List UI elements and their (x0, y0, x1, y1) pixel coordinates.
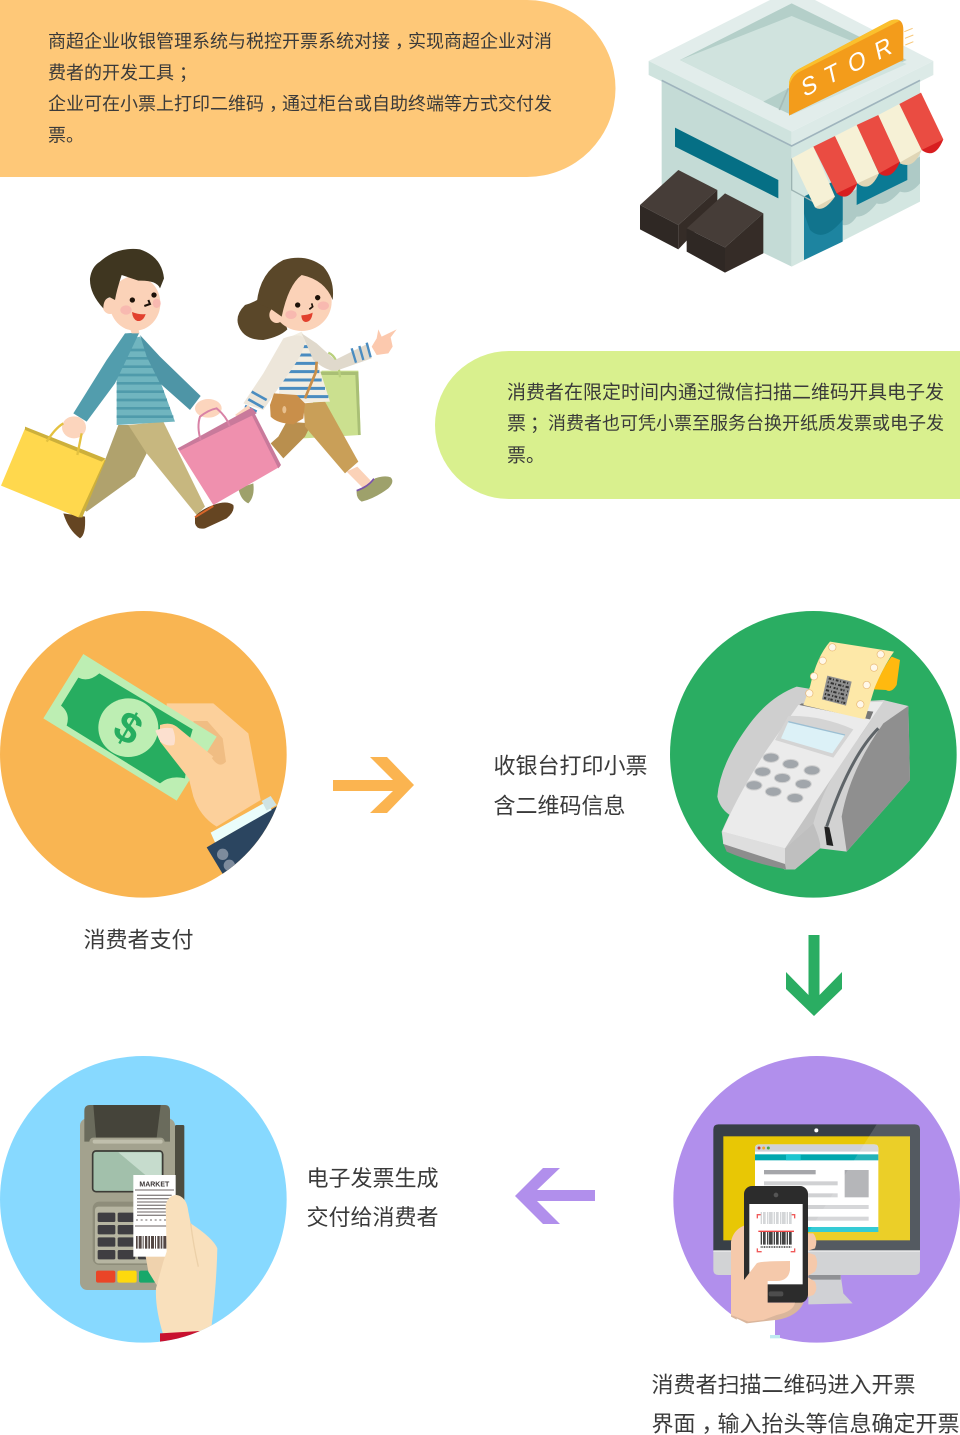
step 1 icon: consumer pays with cash: $ (105, 702, 150, 755)
panel: green consumer bubble: 票。 (507, 446, 545, 466)
illustration: store: R (873, 32, 894, 67)
step 1 icon: consumer pays with cash (0, 611, 293, 898)
arrow: green down (786, 935, 842, 1016)
pink bag (178, 408, 281, 505)
illustration: store: O (846, 45, 869, 80)
arrow: orange right (333, 757, 414, 813)
arrow: purple left (515, 1168, 595, 1224)
label: e-invoice delivered: 电子发票生成 (306, 1166, 439, 1191)
woman figure (235, 258, 397, 503)
illustration: store: S (799, 69, 820, 103)
illustration: store (640, 0, 943, 273)
yellow bag (1, 423, 106, 517)
step 2 icon: POS printer with QR receipt (670, 611, 957, 898)
label: printed receipt step: 含二维码信息 (494, 794, 626, 818)
panel: green consumer bubble: 消费者在限定时间内通过微信扫描二维码开具电子发 (507, 382, 944, 404)
label: scan and confirm invoice (652, 1372, 960, 1435)
panel: orange intro bubble: 商超企业收银管理系统与税控开票系统对接 ，实现商超企业对消 (48, 32, 552, 52)
illustration: store: T (823, 58, 842, 91)
step 4 icon: electronic invoice delivered: MARKET (139, 1181, 170, 1188)
man figure (62, 249, 234, 538)
panel: orange intro bubble: 企业可在小票上打印二维码 ，通过柜台或自助终端等方式交付发 (48, 94, 552, 114)
label: scan and confirm invoice: 消费者扫描二维码进入开票 (652, 1372, 916, 1398)
panel: orange intro bubble: 费者的开发工具 ； (48, 63, 197, 83)
label: consumer pays: 消费者支付 (84, 928, 194, 952)
panel: green consumer bubble: 消费者也可凭小票至服务台换开纸质发票或电子发 (548, 414, 944, 434)
step 3 icon: scan code on monitor (673, 1056, 960, 1343)
panel: green consumer bubble: 票； (507, 414, 549, 434)
step 4 icon: electronic invoice delivered (0, 1056, 287, 1345)
panel: orange intro bubble (0, 0, 616, 177)
label: printed receipt step: 收银台打印小票 (494, 754, 648, 778)
illustration: shopping couple (1, 249, 397, 538)
label: e-invoice delivered (306, 1166, 439, 1230)
panel: orange intro bubble: 票。 (48, 126, 84, 146)
panel: green consumer bubble (435, 351, 960, 499)
label: printed receipt step (494, 754, 648, 818)
label: e-invoice delivered: 交付给消费者 (306, 1205, 439, 1230)
